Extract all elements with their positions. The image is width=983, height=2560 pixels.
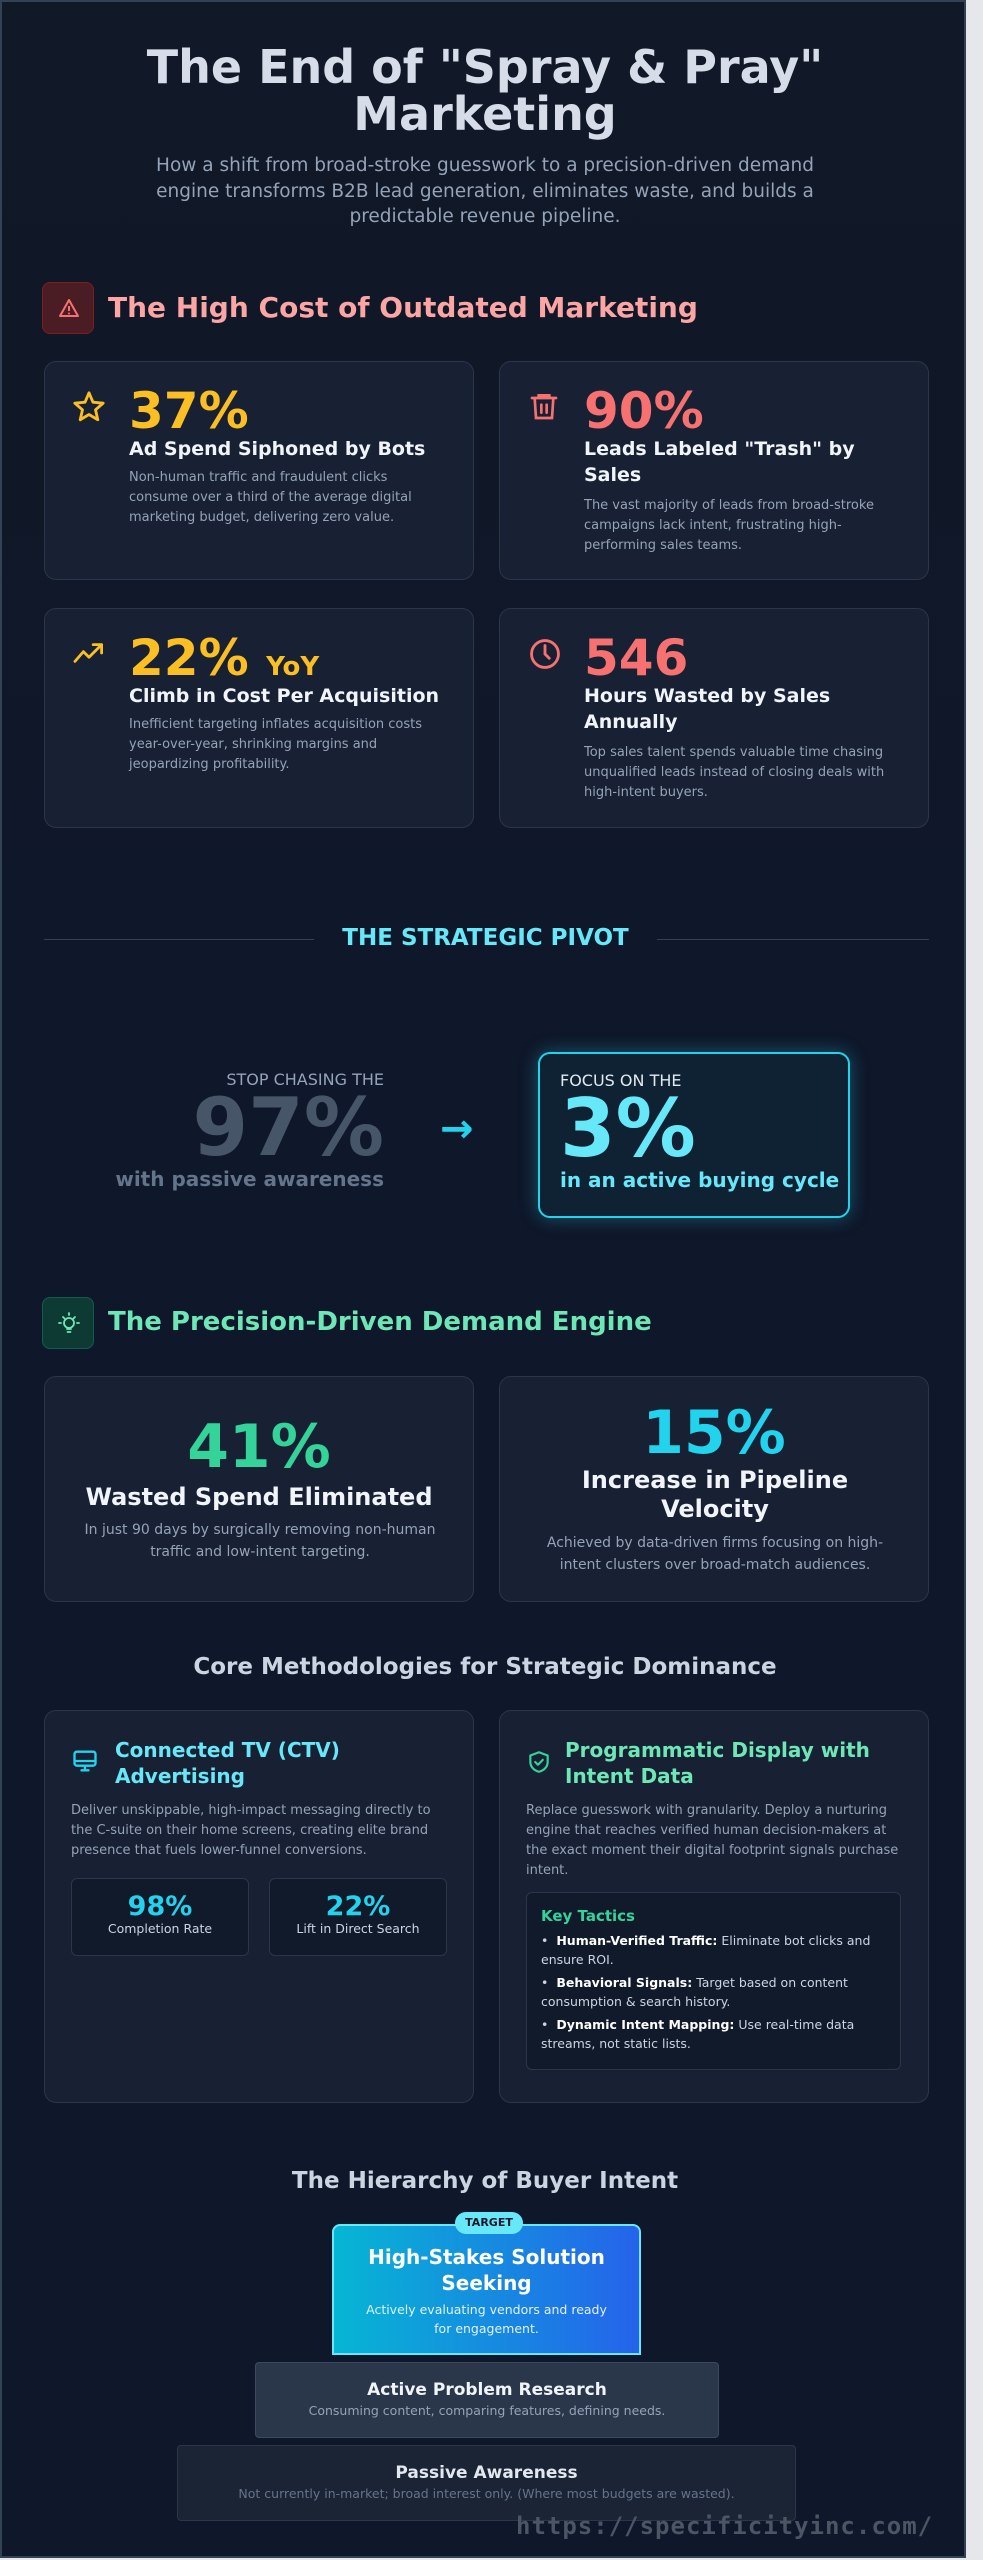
icon: trend up — [74, 643, 104, 663]
card: 546 — [499, 608, 929, 828]
pivot: 3% box: in an active buying cycle — [560, 1168, 839, 1192]
panel: programmatic: Intent Data — [565, 1764, 694, 1788]
pivot: 3% box: FOCUS ON THE — [560, 1071, 681, 1090]
card: 15%: Achieved by data-driven firms focusing on high-intent clusters over broad-match audiences. — [547, 1535, 883, 1573]
arrow: → — [440, 1106, 474, 1152]
card: 15%: 15% — [642, 1398, 786, 1468]
hierarchy heading: The Hierarchy of Buyer Intent — [292, 2168, 678, 2194]
tier: active research: Active Problem Research — [367, 2380, 607, 2400]
tier: active research — [255, 2362, 719, 2438]
card: 90% — [499, 361, 929, 580]
card: 546: Top sales talent spends valuable time chasing unqualified leads instead of closing deals with high-intent buyers. — [584, 745, 884, 800]
section heading: high cost: The High Cost of Outdated Marketing — [108, 291, 698, 324]
card: 41%: In just 90 days by surgically removing non-human traffic and low-intent targeting. — [85, 1522, 435, 1560]
key tactics box: • Human-Verified Traffic: Eliminate bot clicks and ensure ROI. — [541, 1933, 870, 1967]
section heading: precision engine — [42, 1297, 652, 1349]
tier: high-stakes: High-Stakes Solution — [368, 2245, 605, 2269]
panel: CTV: Advertising — [115, 1764, 245, 1788]
card: 22%: Climb in Cost Per Acquisition — [129, 685, 439, 707]
card: 37%: Non-human traffic and fraudulent clicks consume over a third of the average digital marketing budget, delivering zero value. — [129, 470, 412, 525]
tier: high-stakes: Actively evaluating vendors and ready — [366, 2302, 607, 2317]
tier: passive: Not currently in-market; broad interest only. (Where most budgets are wasted). — [238, 2486, 735, 2501]
card: 15% — [499, 1376, 929, 1602]
card: 90%: Leads Labeled "Trash" by Sales — [584, 438, 855, 486]
card: 22%: 22% YoY — [129, 629, 319, 687]
pivot: 97%: 97% — [193, 1081, 384, 1174]
panel: CTV: Deliver unskippable, high-impact messaging directly to the C-suite on their home screens, creating elite brand presence that fuels lower-funnel conversions. — [71, 1803, 431, 1858]
pivot: 97% — [115, 1070, 384, 1191]
icon: bot star — [73, 391, 105, 422]
tier: passive: Passive Awareness — [395, 2463, 578, 2483]
watermark url: https://specificityinc.com/ — [516, 2512, 933, 2540]
title: Marketing — [353, 87, 617, 141]
stat: 98%: Completion Rate — [108, 1921, 212, 1936]
badge: target: TARGET — [465, 2216, 513, 2229]
card: 546: 546 — [584, 629, 688, 687]
stat: 22%: 22% — [326, 1891, 390, 1922]
key tactics box: Key Tactics — [541, 1907, 635, 1925]
card: 90%: 90% — [584, 382, 704, 440]
panel: programmatic: Programmatic Display with — [565, 1738, 870, 1762]
key tactics box — [526, 1892, 901, 2070]
icon: bulb — [42, 1297, 94, 1349]
pivot heading: THE STRATEGIC PIVOT — [342, 925, 629, 951]
icon: tv — [73, 1750, 97, 1772]
card: 15%: Increase in Pipeline Velocity — [582, 1466, 848, 1523]
card: 41%: Wasted Spend Eliminated — [85, 1483, 433, 1511]
panel: programmatic: Replace guesswork with granularity. Deploy a nurturing engine that reaches verified human decision-makers at the exact moment their digital footprint signals purchase intent. — [526, 1803, 898, 1878]
section heading: precision engine: The Precision-Driven Demand Engine — [108, 1307, 652, 1337]
card: 90%: The vast majority of leads from broad-stroke campaigns lack intent, frustrating high-performing sales teams. — [584, 498, 874, 553]
subtitle: How a shift from broad-stroke guesswork to a precision-driven demand engine transforms B2B lead generation, eliminates waste, and builds a predictable revenue pipeline. — [156, 155, 814, 227]
card: 37% — [44, 361, 474, 580]
card: 37%: Ad Spend Siphoned by Bots — [129, 438, 425, 460]
key tactics box: • Dynamic Intent Mapping: Use real-time data streams, not static lists. — [541, 2017, 854, 2051]
section heading: high cost — [42, 282, 698, 334]
stat: 98% — [71, 1878, 249, 1956]
methodologies heading: Core Methodologies for Strategic Dominance — [193, 1654, 777, 1680]
card: 41%: 41% — [187, 1412, 331, 1482]
pivot: 97%: STOP CHASING THE — [226, 1070, 384, 1089]
panel: CTV — [44, 1710, 474, 2103]
title: The End of "Spray & Pray" — [147, 40, 823, 94]
panel: programmatic — [499, 1710, 929, 2103]
card: 22% — [44, 608, 474, 828]
icon: warning — [42, 282, 94, 334]
tier: high-stakes: Seeking — [441, 2271, 532, 2295]
badge: target — [455, 2212, 523, 2234]
tier: high-stakes — [332, 2224, 641, 2355]
tier: passive — [177, 2445, 796, 2521]
stat: 98%: 98% — [128, 1891, 192, 1922]
icon: shield — [529, 1751, 549, 1773]
stat: 22% — [269, 1878, 447, 1956]
panel: CTV: Connected TV (CTV) — [115, 1738, 340, 1762]
stat: 22%: Lift in Direct Search — [296, 1921, 420, 1936]
pivot: 3% box — [538, 1052, 850, 1218]
icon: trash — [530, 394, 558, 420]
card: 22%: Inefficient targeting inflates acquisition costs year-over-year, shrinking margins and jeopardizing profitability. — [129, 717, 422, 772]
pivot: 3% box: 3% — [560, 1082, 696, 1175]
title — [146, 40, 823, 141]
tier: active research: Consuming content, comparing features, defining needs. — [309, 2403, 665, 2418]
key tactics box: • Behavioral Signals: Target based on content consumption & search history. — [541, 1975, 848, 2009]
card: 37%: 37% — [129, 382, 249, 440]
pivot: 97%: with passive awareness — [115, 1167, 384, 1191]
tier: high-stakes: for engagement. — [434, 2321, 539, 2336]
icon: clock — [530, 639, 560, 669]
card: 41% — [44, 1376, 474, 1602]
card: 546: Hours Wasted by Sales Annually — [584, 685, 830, 733]
